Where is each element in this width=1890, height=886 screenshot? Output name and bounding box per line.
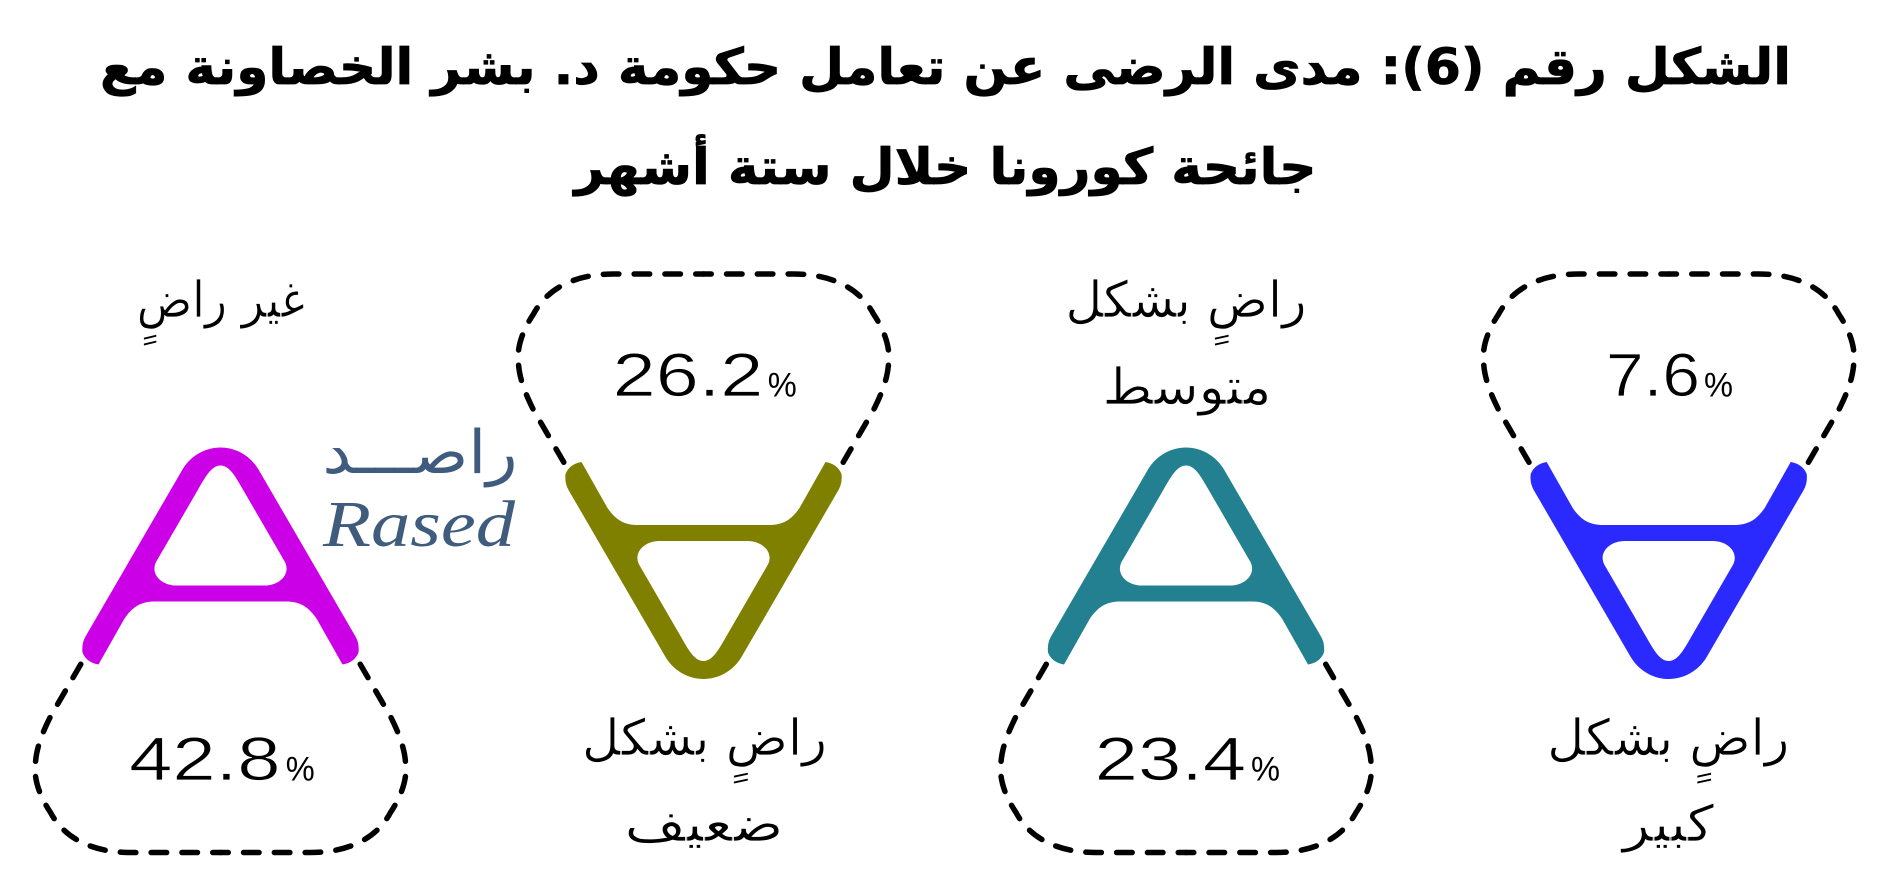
panel: satisfied to a medium degree (1001, 271, 1371, 852)
label: medium: متوسط (1102, 358, 1272, 416)
value: 7.6% (1606, 341, 1733, 409)
panel: satisfied to a weak degree (518, 274, 889, 853)
label: medium: راضٍ بشكل (1066, 271, 1306, 346)
label: weak: ضعيف (624, 795, 784, 853)
panel: not satisfied (35, 271, 406, 852)
label: not satisfied: غير راضٍ (137, 271, 305, 346)
label: large: راضٍ بشكل (1547, 709, 1789, 784)
title (100, 38, 1791, 197)
label: large (1547, 709, 1789, 853)
label: weak: راضٍ بشكل (582, 709, 827, 784)
logo: Rased: Rased (322, 488, 516, 561)
value: 26.2%: % (768, 366, 797, 404)
title: الشكل رقم (6): مدى الرضى عن تعامل حكومة د. بشر الخصاونة مع (100, 38, 1791, 97)
value: 23.4% (1095, 725, 1280, 793)
label: medium (1066, 271, 1306, 416)
icon: teal gauge with dashed loop (1001, 448, 1371, 852)
value: 42.8%: 42.8 (129, 725, 281, 793)
value: 42.8% (129, 725, 315, 793)
title: جائحة كورونا خلال ستة أشهر (571, 134, 1316, 197)
panel: satisfied to a large degree (1483, 274, 1854, 853)
label: large: كبير (1619, 795, 1714, 853)
value: 23.4%: % (1251, 750, 1280, 788)
icon: olive gauge with dashed loop (518, 274, 889, 679)
value: 42.8%: % (286, 750, 315, 788)
value: 7.6%: 7.6 (1606, 341, 1700, 409)
value: 7.6%: % (1704, 366, 1733, 404)
icon: blue gauge with dashed loop (1483, 274, 1854, 679)
value: 26.2%: 26.2 (613, 341, 763, 409)
logo: Rased (322, 418, 518, 561)
icon: magenta gauge with dashed loop (35, 448, 406, 852)
value: 23.4%: 23.4 (1095, 725, 1246, 793)
logo: Rased: راصـــد (322, 418, 518, 488)
label: weak (582, 709, 827, 853)
value: 26.2% (613, 341, 797, 409)
